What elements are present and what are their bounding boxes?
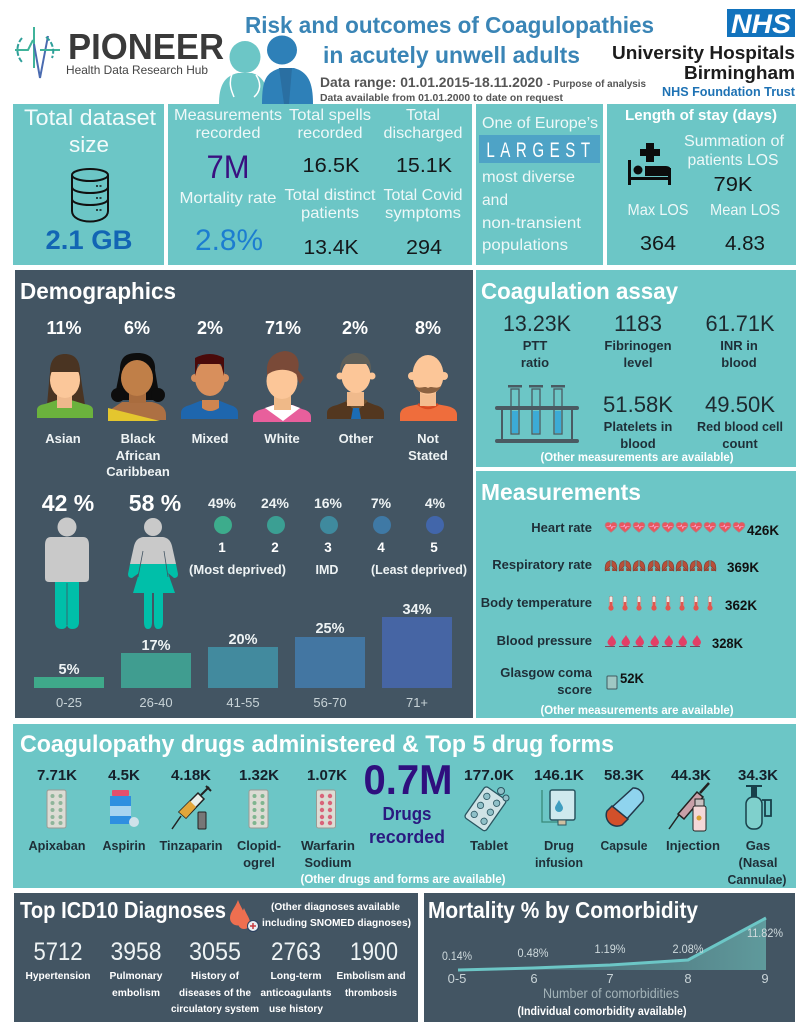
data labels: [442, 926, 783, 963]
diagnosis: Hypertension: [26, 938, 90, 982]
stat: measurements recorded: recorded: [196, 125, 260, 142]
diagnosis: Hypertension: Hypertension: [26, 970, 90, 982]
stat: summation of patients LOS: Summation of: [684, 133, 785, 150]
drug: Clopidogrel: 1.32K: [239, 767, 279, 784]
diagnosis: Embolism and thrombosis: Embolism and: [336, 970, 406, 982]
drug: Tinzaparin: 4.18K: [171, 767, 211, 784]
stat: platelets in blood: 51.58K: [603, 392, 673, 417]
diagnosis: Hypertension: 5712: [34, 938, 82, 966]
bar values: 5%: [59, 662, 80, 678]
stat: total covid symptoms: [384, 187, 462, 259]
panel: length of stay: [607, 104, 796, 265]
row: respiratory rate: [492, 557, 759, 575]
stat: max LOS: 364: [640, 233, 676, 255]
stat: fibrinogen level: level: [624, 355, 652, 370]
form: Drug infusion: infusion: [535, 855, 583, 870]
diagnosis: Long-term anticoagulants use history: [260, 938, 332, 1015]
IMD ranks: 5: [430, 540, 438, 555]
icon: Other avatar: [327, 353, 384, 419]
text: most diverse populations: most diverse: [482, 169, 575, 186]
data labels: 0.48%: [518, 946, 549, 960]
drug: Warfarin Sodium: 1.07K: [307, 767, 347, 784]
diagnosis: Embolism and thrombosis: 1900: [350, 938, 398, 966]
diagnosis: History of diseases of the circulatory system: History of: [191, 970, 239, 982]
row: Glasgow coma score: 52K: [620, 670, 644, 686]
ethnicity percentages: 71%: [265, 318, 301, 338]
diagnosis: Long-term anticoagulants use history: anticoagulants: [260, 987, 332, 999]
stat: INR in blood: 61.71K: [706, 311, 775, 336]
stat: total discharged: 15.1K: [396, 155, 453, 177]
data labels: 0.14%: [442, 949, 472, 963]
data range note: Data available from 01.01.2000 to date on request: [320, 92, 563, 104]
text: most diverse populations: and: [482, 192, 508, 209]
ethnicity labels: [45, 431, 448, 479]
data labels: 11.82%: [747, 926, 783, 940]
data labels: 2.08%: [672, 942, 704, 956]
stat: total distinct patients: 13.4K: [304, 237, 359, 259]
IMD percentages: 7%: [371, 495, 392, 511]
stat: drugs recorded: 0.7M: [364, 756, 452, 803]
row: body temperature: 362K: [725, 597, 757, 613]
age axis labels: 26-40: [139, 695, 173, 710]
row: blood pressure: 328K: [712, 635, 743, 651]
axis title: Number of comorbidities: [543, 985, 679, 1001]
stat: mortality rate: [180, 190, 277, 257]
IMD ranks: 4: [377, 540, 385, 555]
axis labels: 0-5: [448, 971, 466, 986]
stat: PTT ratio: [503, 311, 571, 370]
drug: Aspirin: 4.5K: [108, 767, 140, 784]
stat: total discharged: discharged: [384, 125, 462, 142]
text: one of Europe's: One of Europe’s: [482, 115, 598, 132]
row: Glasgow coma score: Glasgow coma: [500, 665, 593, 680]
ethnicity labels: Not: [417, 431, 439, 446]
panel: mortality by comorbidity: [424, 893, 795, 1022]
icon: Black African Caribbean avatar: [108, 353, 166, 421]
stat: drugs recorded: Drugs: [382, 804, 432, 824]
stat: drugs recorded: recorded: [369, 827, 445, 847]
stat: total spells recorded: 16.5K: [302, 155, 360, 177]
ethnicity labels: Stated: [408, 448, 448, 463]
data range note: Data range: 01.01.2015-18.11.2020: [320, 74, 543, 90]
panel: coagulation assay: [476, 270, 796, 467]
diagnosis: Pulmonary embolism: embolism: [112, 987, 160, 999]
ethnicity labels: White: [264, 431, 300, 446]
age axis labels: 71+: [406, 695, 428, 710]
text: most diverse populations: [482, 169, 582, 254]
form: Tablet: 177.0K: [464, 767, 514, 784]
drug: Apixaban: 7.71K: [37, 767, 77, 784]
row: Glasgow coma score: [500, 665, 644, 697]
bar chart: age groups: [34, 602, 452, 710]
icon: hospital bed: [628, 143, 671, 185]
stat: total spells recorded: recorded: [298, 125, 362, 142]
footnote: (Other drugs and forms are available): [300, 874, 506, 886]
bar values: 34%: [402, 602, 432, 618]
stat: mean LOS: [710, 202, 780, 255]
wordmark: PIONEER: [68, 26, 224, 67]
stat: mortality rate: 2.8%: [195, 224, 263, 257]
form: Injection: Injection: [666, 838, 720, 853]
stat: INR in blood: blood: [721, 355, 757, 370]
row: Glasgow coma score: score: [557, 682, 592, 697]
form: Gas (nasal cannulae): (Nasal: [738, 855, 778, 870]
trust name: Birmingham: [684, 63, 795, 83]
form: Drug infusion: Drug: [544, 838, 574, 853]
drug: Clopidogrel: [237, 767, 281, 870]
form: Injection: [666, 767, 720, 853]
form: Gas (nasal cannulae): Cannulae): [728, 872, 786, 887]
ethnicity percentages: 6%: [124, 318, 150, 338]
data range note: [320, 74, 646, 104]
drug: Warfarin Sodium: Sodium: [304, 855, 352, 870]
age axis labels: [56, 695, 428, 710]
axis labels: [448, 971, 769, 986]
IMD captions: IMD: [316, 563, 338, 577]
NHS lozenge: NHS: [731, 9, 791, 39]
stat: mean LOS: 4.83: [725, 233, 765, 255]
icon: Mixed avatar: [181, 354, 238, 419]
panel: measurements: [476, 471, 796, 718]
stat: fibrinogen level: [604, 311, 672, 370]
value: 2.1 GB: [46, 225, 132, 255]
stat: red blood cell count: [697, 392, 783, 451]
bar values: [59, 602, 432, 678]
stat: INR in blood: INR in: [720, 338, 758, 353]
icon: Pioneer cross emblem: [15, 27, 60, 78]
trust name: [612, 43, 796, 99]
drug: Aspirin: Aspirin: [102, 838, 146, 853]
diagnosis: Embolism and thrombosis: thrombosis: [345, 987, 397, 999]
diagnosis: Long-term anticoagulants use history: Long-term: [270, 970, 322, 982]
diagnosis: History of diseases of the circulatory system: circulatory system: [171, 1003, 259, 1015]
stat: red blood cell count: 49.50K: [705, 392, 775, 417]
panel: key counts: [168, 104, 472, 265]
IMD captions: (Most deprived): [189, 563, 286, 577]
IMD ranks: 1: [218, 540, 226, 555]
panel: demographics: [15, 270, 473, 718]
age axis labels: 56-70: [313, 695, 347, 710]
heading: Coagulation assay: [481, 278, 678, 304]
stat: measurements recorded: Measurements: [174, 107, 282, 124]
footnote: (Other measurements are available): [540, 705, 734, 717]
stat: total spells recorded: [289, 107, 371, 177]
drug: Tinzaparin: Tinzaparin: [160, 838, 223, 853]
diagnosis: History of diseases of the circulatory system: diseases of the: [179, 987, 251, 999]
axis labels: 8: [684, 971, 692, 986]
title: in acutely unwell adults: [323, 42, 580, 68]
icon: male figure: [45, 518, 89, 629]
stat: total spells recorded: Total spells: [289, 107, 371, 124]
data range note: - Purpose of analysis: [547, 78, 646, 90]
icon: database: [72, 169, 108, 222]
logo: NHS University Hospitals Birmingham: [612, 9, 796, 99]
IMD percentages: 16%: [314, 495, 343, 511]
diagnosis: Long-term anticoagulants use history: use history: [269, 1003, 323, 1015]
stat: total covid symptoms: Total Covid: [384, 187, 462, 204]
drug: Clopidogrel: ogrel: [243, 855, 275, 870]
panel: one of Europe's largest: [476, 104, 603, 265]
row: respiratory rate: 369K: [727, 559, 759, 575]
panel: total dataset size: [13, 104, 164, 265]
stat: platelets in blood: [603, 392, 673, 451]
badge: LARGEST: LARGEST: [486, 137, 596, 162]
stat: total discharged: [384, 107, 462, 177]
row: heart rate: 426K: [747, 522, 779, 538]
heading: Demographics: [20, 278, 176, 304]
form: Drug infusion: [534, 767, 584, 870]
icon: test tube rack: [495, 385, 579, 443]
IMD deprivation scale: [189, 495, 467, 577]
stat: PTT ratio: 13.23K: [503, 311, 571, 336]
stat: mortality rate: Mortality rate: [180, 190, 277, 207]
diagnosis: History of diseases of the circulatory system: 3055: [189, 938, 241, 966]
form: Gas (nasal cannulae): [728, 767, 786, 887]
stat: red blood cell count: Red blood cell: [697, 419, 783, 434]
row: heart rate: [531, 520, 779, 538]
age axis labels: 0-25: [56, 695, 82, 710]
footnote: (Individual comorbidity available): [518, 1006, 687, 1018]
ethnicity percentages: 11%: [46, 318, 82, 338]
form: Capsule: [600, 767, 648, 853]
ethnicity labels: Other: [339, 431, 373, 446]
IMD percentages: 24%: [261, 495, 290, 511]
bars: [34, 617, 452, 688]
bar values: 25%: [315, 621, 345, 637]
heading: Total dataset: [24, 105, 156, 130]
title: [245, 12, 654, 68]
stat: PTT ratio: PTT: [523, 338, 547, 353]
IMD dots: [214, 516, 444, 534]
heading: Mortality % by Comorbidity: [428, 897, 698, 923]
stat: summation of patients LOS: [684, 133, 785, 196]
stat: INR in blood: [706, 311, 775, 370]
row: heart rate: Heart rate: [531, 520, 592, 535]
form: Gas (nasal cannulae): 34.3K: [738, 767, 778, 784]
text: most diverse populations: non-transient: [482, 215, 582, 232]
trust name: NHS Foundation Trust: [662, 84, 796, 99]
diagnosis: Pulmonary embolism: [110, 938, 163, 999]
stat: total distinct patients: patients: [301, 205, 359, 222]
icon: nurse and doctor silhouettes: [219, 36, 313, 104]
stat: max LOS: [628, 202, 688, 255]
bar values: 17%: [141, 638, 171, 654]
stat: mean LOS: Mean LOS: [710, 202, 780, 219]
stat: measurements recorded: 7M: [206, 149, 250, 185]
note: other diagnoses: (Other diagnoses available: [271, 901, 400, 913]
stat: total covid symptoms: symptoms: [385, 205, 461, 222]
icon: blood drops: [230, 900, 258, 932]
stat: summation of patients LOS: 79K: [714, 174, 753, 196]
panel: coagulopathy drugs and drug forms: [13, 724, 796, 888]
ethnicity percentages: [46, 318, 441, 338]
form: Gas (nasal cannulae): Gas: [746, 838, 770, 853]
IMD ranks: [218, 540, 438, 555]
gender percentages: 42 %: [42, 490, 94, 516]
drug: Apixaban: [28, 767, 86, 853]
ethnicity labels: African: [116, 448, 160, 463]
stat: fibrinogen level: Fibrinogen: [604, 338, 672, 353]
bar values: 20%: [228, 632, 258, 648]
stat: drugs recorded: [364, 756, 452, 847]
axis labels: 6: [530, 971, 538, 986]
text: most diverse populations: populations: [482, 237, 568, 254]
drug: Clopidogrel: Clopid-: [237, 838, 281, 853]
ethnicity percentages: 8%: [415, 318, 441, 338]
heading: Top ICD10 Diagnoses: [20, 897, 226, 923]
drug: Aspirin: [102, 767, 146, 853]
stat: total covid symptoms: 294: [406, 237, 442, 259]
diagnosis: Embolism and thrombosis: [336, 938, 406, 999]
form: Tablet: Tablet: [470, 838, 509, 853]
icon: female figure: [128, 518, 178, 629]
ethnicity labels: Asian: [45, 431, 81, 446]
form: Tablet: [464, 767, 514, 853]
diagnosis: Pulmonary embolism: 3958: [110, 938, 162, 966]
icon: Not Stated avatar: [400, 355, 457, 421]
stat: PTT ratio: ratio: [521, 355, 549, 370]
note: other diagnoses: [262, 901, 411, 929]
IMD percentages: 4%: [425, 495, 446, 511]
age axis labels: 41-55: [226, 695, 260, 710]
IMD percentages: [208, 495, 446, 511]
icon: Asian avatar: [37, 354, 93, 418]
IMD ranks: 2: [271, 540, 279, 555]
drug: Apixaban: Apixaban: [28, 838, 86, 853]
form: Drug infusion: 146.1K: [534, 767, 584, 784]
heading: [24, 105, 156, 157]
ethnicity labels: Caribbean: [106, 464, 170, 479]
drug: Warfarin Sodium: [301, 767, 355, 870]
heading: Length of stay (days): [625, 107, 777, 124]
strapline: Health Data Research Hub: [66, 63, 208, 77]
data labels: 1.19%: [594, 942, 626, 956]
stat: red blood cell count: count: [722, 436, 758, 451]
row: blood pressure: [497, 633, 743, 651]
axis labels: 9: [761, 971, 769, 986]
IMD ranks: 3: [324, 540, 332, 555]
stat: measurements recorded: [174, 107, 282, 185]
diagnosis: History of diseases of the circulatory system: [171, 938, 259, 1015]
stat: summation of patients LOS: patients LOS: [688, 152, 778, 169]
panel: top ICD10 diagnoses: [14, 893, 418, 1022]
ethnicity labels: Black: [121, 431, 156, 446]
heading: Measurements: [481, 479, 641, 505]
row: body temperature: [481, 595, 757, 613]
axis labels: 7: [606, 971, 614, 986]
logo: PIONEER Health Data Research Hub: [15, 26, 224, 78]
form: Capsule: 58.3K: [604, 767, 644, 784]
ethnicity labels: Mixed: [192, 431, 228, 446]
stat: platelets in blood: blood: [620, 436, 656, 451]
stat: total discharged: Total: [406, 107, 440, 124]
gender percentages: 58 %: [129, 490, 181, 516]
diagnosis: Pulmonary embolism: Pulmonary: [110, 970, 163, 982]
row: respiratory rate: Respiratory rate: [492, 557, 592, 572]
ethnicity percentages: 2%: [342, 318, 368, 338]
drug: Warfarin Sodium: Warfarin: [301, 838, 355, 853]
footnote: (Other measurements are available): [540, 452, 734, 464]
trust name: University Hospitals: [612, 43, 795, 63]
note: other diagnoses: including SNOMED diagnoses): [262, 917, 411, 929]
stat: fibrinogen level: 1183: [614, 311, 662, 336]
IMD percentages: 49%: [208, 495, 237, 511]
IMD captions: (Least deprived): [371, 563, 467, 577]
gender percentages: [42, 490, 181, 516]
stat: max LOS: Max LOS: [628, 202, 688, 219]
stat: platelets in blood: Platelets in: [604, 419, 672, 434]
row: body temperature: Body temperature: [481, 595, 592, 610]
row: blood pressure: Blood pressure: [497, 633, 592, 648]
form: Injection: 44.3K: [671, 767, 711, 784]
icon: White avatar: [253, 351, 311, 422]
line chart: [442, 918, 783, 1001]
drug: Tinzaparin: [160, 767, 223, 853]
heading: Coagulopathy drugs administered & Top 5 drug forms: [20, 731, 614, 758]
form: Capsule: Capsule: [600, 838, 648, 853]
heading: size: [69, 132, 109, 157]
title: Risk and outcomes of Coagulopathies: [245, 12, 654, 38]
diagnosis: Long-term anticoagulants use history: 2763: [271, 938, 321, 966]
stat: total distinct patients: [284, 187, 376, 259]
stat: total distinct patients: Total distinct: [284, 187, 376, 204]
IMD captions: [189, 563, 467, 577]
ethnicity percentages: 2%: [197, 318, 223, 338]
